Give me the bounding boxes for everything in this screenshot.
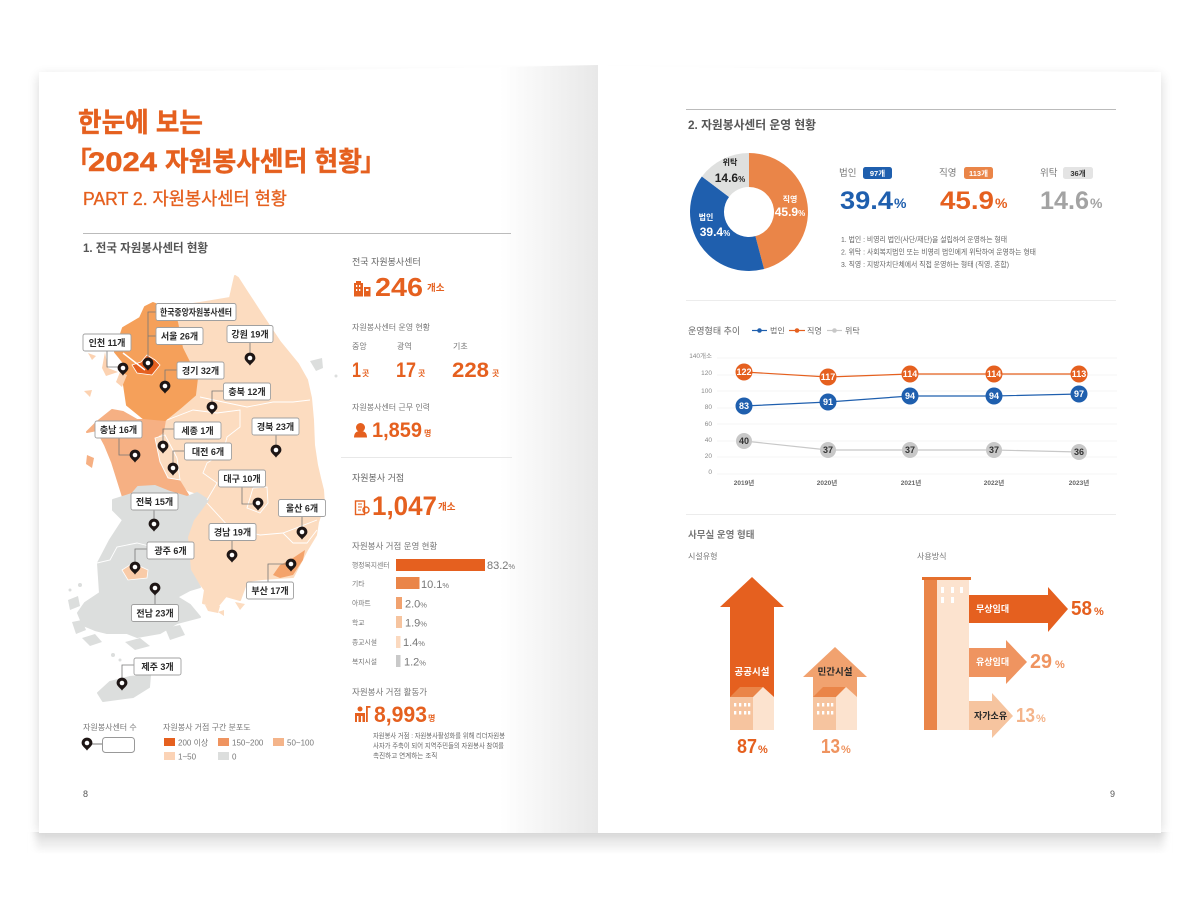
donut chart: 45.9% <box>775 205 805 219</box>
map legend: distribution: 1~50 <box>178 752 197 762</box>
title: 「 <box>65 147 92 177</box>
arrow: private facility: 민간시설 <box>818 666 852 678</box>
region: Chungnam <box>87 410 188 497</box>
bar chart: base operating status: 1.4% <box>403 637 425 649</box>
stat: operating status: 228 <box>452 359 489 382</box>
subtitle: PART 2. 자원봉사센터 현황 <box>83 189 287 209</box>
series: consigned <box>736 433 1087 460</box>
definitions: 3. 직영 : 지방자치단체에서 직접 운영하는 형태 (직영, 혼합) <box>841 260 1009 269</box>
bar chart: base operating status: 학교 <box>352 618 365 627</box>
stat: operating status <box>352 322 499 382</box>
islands <box>68 358 338 662</box>
stat: direct: 45.9 <box>940 187 994 215</box>
map of Korea <box>68 276 338 701</box>
stat: bases: 자원봉사 거점 <box>352 472 404 483</box>
donut chart: 14.6% <box>715 171 745 185</box>
page number 9: 9 <box>1110 789 1115 799</box>
stat: activists: 명 <box>428 713 435 723</box>
bar chart: base operating status <box>352 541 515 668</box>
arrow: private facility: % <box>841 744 851 756</box>
region labels: 대전 6개 <box>192 446 224 457</box>
region: Incheon <box>84 352 127 397</box>
arrow: paid lease <box>969 640 1065 684</box>
region labels: 세종 1개 <box>181 425 214 436</box>
stat: national centres: 개소 <box>427 282 445 294</box>
arrow: public facility: 87 <box>737 736 757 758</box>
series: direct: 117 <box>821 372 835 382</box>
stat: operating status: 곳 <box>418 369 425 378</box>
page: right <box>598 65 1161 833</box>
bar chart: base operating status: 1.9% <box>405 618 427 630</box>
bar chart: base operating status: 아파트 <box>352 598 371 608</box>
axis: 40 <box>705 437 712 444</box>
arrow: paid lease: % <box>1055 659 1065 671</box>
stat: corporate <box>839 167 907 215</box>
arrow: paid lease: 29 <box>1030 651 1052 673</box>
stat: national centres <box>352 257 445 302</box>
map legend: distribution: 200 이상 <box>178 738 209 748</box>
connectors <box>107 312 302 679</box>
region labels: 제주 3개 <box>141 661 174 672</box>
axis: 2020년 <box>817 478 837 487</box>
stat: operating status: 자원봉사센터 운영 현황 <box>352 322 431 332</box>
chart legend: 위탁 <box>845 326 860 336</box>
region: Gwangju <box>122 563 148 580</box>
arrow: owned: 13 <box>1016 705 1035 727</box>
arrow: public facility: % <box>758 744 768 756</box>
building <box>922 577 971 730</box>
title: 한눈에 보는 <box>78 108 203 138</box>
arrow: free lease: 58 <box>1071 598 1092 620</box>
donut chart: 위탁 <box>723 157 738 167</box>
map legend: distribution: 0 <box>232 752 237 762</box>
bar chart: base operating status: 복지시설 <box>352 657 377 666</box>
region labels: 강원 19개 <box>231 328 269 340</box>
arrow: free lease: % <box>1094 606 1104 618</box>
stat: bases: 개소 <box>438 501 456 513</box>
series: corporate: 94 <box>989 391 999 401</box>
axis: 0 <box>708 469 712 476</box>
chart legend: 직영 <box>807 326 822 336</box>
axis <box>689 351 1089 487</box>
axis: 60 <box>705 421 712 428</box>
series: direct: 113 <box>1072 369 1086 379</box>
series: direct <box>736 364 1088 386</box>
heading: section 1: 1. 전국 자원봉사센터 현황 <box>83 240 208 255</box>
stat: operating status: 1 <box>352 359 361 382</box>
stat: direct: 직영 <box>939 168 956 179</box>
region labels: 충남 16개 <box>100 424 137 435</box>
axis: 80 <box>705 404 712 411</box>
bar chart: base operating status: 종교시설 <box>352 638 377 646</box>
grid <box>717 358 1117 474</box>
region: Jeju <box>98 675 150 701</box>
region: Busan <box>273 550 305 578</box>
title: 」 <box>360 147 387 177</box>
stat: operating status: 중앙 <box>352 341 367 351</box>
region labels: 광주 6개 <box>154 545 187 556</box>
stat: consigned: 36개 <box>1070 168 1086 178</box>
map legend: distribution: 150~200 <box>232 738 264 748</box>
series: corporate <box>736 386 1088 414</box>
map legend: centre count: 자원봉사센터 수 <box>83 722 137 732</box>
series: consigned: 40 <box>739 436 749 446</box>
stat: consigned: 14.6 <box>1040 187 1089 215</box>
stat: corporate: % <box>894 195 907 211</box>
series: corporate: 83 <box>739 401 749 411</box>
icon: base building <box>356 501 369 514</box>
series: consigned: 37 <box>905 445 915 455</box>
map legend: distribution: 자원봉사 거점 구간 분포도 <box>163 722 251 732</box>
bar chart: base operating status: 83.2% <box>487 560 515 572</box>
series: direct: 114 <box>903 369 917 379</box>
region labels: 서울 26개 <box>161 330 198 342</box>
map legend: distribution <box>163 722 314 762</box>
icon: person <box>354 423 367 438</box>
map legend: distribution: 50~100 <box>287 738 314 748</box>
axis: 2023년 <box>1069 478 1089 487</box>
title: 자원봉사센터 현황 <box>165 147 362 177</box>
book shadow <box>36 76 1164 854</box>
arrow: public facility: 공공시설 <box>735 666 769 678</box>
page number 8: 8 <box>83 789 88 799</box>
region labels: 경기 32개 <box>182 365 219 376</box>
series: direct: 122 <box>736 367 752 377</box>
region labels <box>83 304 326 675</box>
axis: 100 <box>701 388 712 395</box>
region: Seoul <box>132 355 160 375</box>
icon: volunteer <box>355 706 370 722</box>
series: direct: 114 <box>987 369 1001 379</box>
region labels: 전남 23개 <box>136 608 174 618</box>
stat: corporate: 97개 <box>870 168 885 178</box>
stat: operating status: 기초 <box>453 342 468 351</box>
stat: activists: 자원봉사 거점 활동가 <box>352 687 427 697</box>
arrow: owned: % <box>1036 713 1046 725</box>
arrow: private facility: 13 <box>821 736 840 758</box>
definitions: 2. 위탁 : 사회복지법인 또는 비영리 법인에게 위탁하여 운영하는 형태 <box>841 248 1036 256</box>
series: corporate: 97 <box>1074 389 1084 399</box>
bar chart: base operating status: 1.2% <box>404 656 426 668</box>
region labels: 한국중앙자원봉사센터 <box>160 306 232 318</box>
bar chart: base operating status: 자원봉사 거점 운영 현황 <box>352 541 437 551</box>
region labels: 경남 19개 <box>214 526 251 538</box>
donut chart: 39.4% <box>700 225 730 239</box>
title <box>65 108 387 177</box>
stat: direct <box>939 167 1008 215</box>
activist definition: 촉진하고 연계하는 조직 <box>373 751 437 760</box>
heading: section 2: 2. 자원봉사센터 운영 현황 <box>688 117 816 132</box>
series: consigned: 36 <box>1074 447 1084 457</box>
stat: operating status: 곳 <box>362 369 369 378</box>
stat: corporate: 39.4 <box>840 187 893 215</box>
map legend: centre count <box>82 722 137 752</box>
arrow: owned: 자가소유 <box>974 710 1007 721</box>
chart legend: 법인 <box>770 326 785 336</box>
page: left <box>39 65 598 833</box>
axis: 2022년 <box>984 478 1004 487</box>
activist definition: 자원봉사 거점 : 자원봉사활성화를 위해 리더자원봉 <box>373 731 505 740</box>
region labels: 대구 10개 <box>223 473 261 484</box>
title: 2024 <box>88 147 157 177</box>
axis: 2021년 <box>901 478 921 487</box>
series: corporate: 91 <box>823 397 833 407</box>
arrow: free lease: 무상임대 <box>976 603 1009 614</box>
bar chart: base operating status: 2.0% <box>405 598 427 610</box>
axis: 20 <box>705 453 712 460</box>
stat: bases <box>352 472 456 521</box>
stat: consigned <box>1040 167 1103 215</box>
region: Sejong and Daejeon <box>155 435 180 480</box>
stat: consigned: 위탁 <box>1040 167 1058 179</box>
series: consigned: 37 <box>823 445 833 455</box>
stat: workforce: 자원봉사센터 근무 인력 <box>352 402 430 412</box>
arrow: paid lease: 유상임대 <box>976 656 1009 667</box>
series: corporate: 94 <box>905 391 915 401</box>
stat: operating status: 광역 <box>397 341 412 351</box>
stat: consigned: % <box>1090 195 1103 211</box>
line chart: operating trend: 운영형태 추이 <box>688 326 740 336</box>
icon: building <box>354 281 370 296</box>
stat: national centres: 246 <box>375 272 423 302</box>
stat: corporate: 법인 <box>839 168 856 179</box>
stat: operating status: 곳 <box>492 369 499 378</box>
axis: 140개소 <box>689 351 712 360</box>
stat: bases: 1,047 <box>372 491 437 521</box>
region: Gyeonggi <box>115 303 197 420</box>
region labels: 부산 17개 <box>251 585 289 596</box>
stat: national centres: 전국 자원봉사센터 <box>352 257 421 267</box>
pins <box>117 353 307 691</box>
arrow: public facility <box>720 577 784 758</box>
bar chart: base operating status: 행정복지센터 <box>352 560 390 570</box>
arrow: free lease <box>969 587 1104 632</box>
axis: 120 <box>701 370 712 377</box>
axis: 2019년 <box>734 478 754 487</box>
heading: usage type: 사용방식 <box>917 551 946 561</box>
donut chart: 법인 <box>699 212 713 222</box>
bar chart: base operating status: 10.1% <box>421 579 449 591</box>
activist definition <box>373 731 505 760</box>
arrow: owned <box>969 693 1046 738</box>
stat: operating status: 17 <box>396 359 416 382</box>
arrow: private facility <box>803 647 867 758</box>
definitions <box>841 235 1036 269</box>
stat: workforce: 명 <box>424 428 431 438</box>
stat: activists: 8,993 <box>374 702 427 727</box>
region: Jeolla <box>78 486 208 637</box>
stat: activists <box>352 687 435 727</box>
line chart: operating trend <box>688 326 1117 487</box>
region: east peach <box>160 276 324 607</box>
activist definition: 사자가 주축이 되어 지역주민들의 자원봉사 참여를 <box>373 741 504 750</box>
region labels: 인천 11개 <box>89 337 125 348</box>
donut chart <box>690 153 808 271</box>
bar chart: base operating status: 기타 <box>352 579 365 588</box>
region labels: 울산 6개 <box>286 502 318 514</box>
region borders <box>97 353 317 563</box>
series: consigned: 37 <box>989 445 999 455</box>
stat: workforce: 1,859 <box>372 419 422 442</box>
stat: direct: % <box>995 195 1008 211</box>
definitions: 1. 법인 : 비영리 법인(사단/재단)을 설립하여 운영하는 형태 <box>841 235 1007 244</box>
region labels: 전북 15개 <box>136 496 173 507</box>
donut chart: 직영 <box>783 194 797 204</box>
region labels: 충북 12개 <box>228 386 266 397</box>
stat: workforce <box>352 402 431 442</box>
stat: direct: 113개 <box>969 168 988 178</box>
heading: office: 사무실 운영 형태 <box>688 529 754 541</box>
region labels: 경북 23개 <box>257 421 294 432</box>
heading: facility type: 시설유형 <box>688 551 717 561</box>
chart legend <box>752 326 860 336</box>
